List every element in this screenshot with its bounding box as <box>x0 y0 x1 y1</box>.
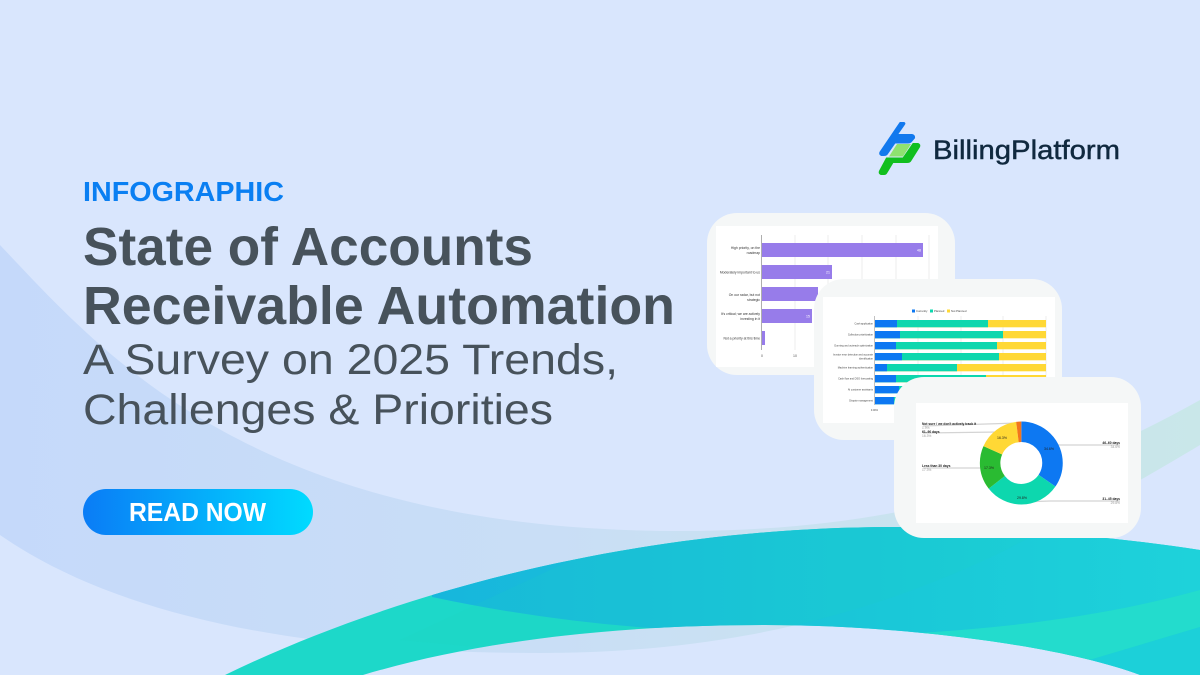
row labels: Machine learning authentication <box>838 366 874 370</box>
title <box>83 217 675 336</box>
panel: days outstanding donut chart <box>894 377 1141 538</box>
bars <box>762 243 923 345</box>
donut labels: 34.6% <box>1111 445 1120 449</box>
row labels: Dunning and outreach optimization <box>834 344 874 348</box>
donut labels: 29.8% <box>1111 501 1120 505</box>
bar labels <box>720 246 760 340</box>
bar labels: roadmap <box>747 251 760 255</box>
donut labels: 46–60 days <box>1102 441 1120 445</box>
panel: adoption stacked bar chart <box>814 279 1062 440</box>
eyebrow label: INFOGRAPHIC <box>83 176 284 207</box>
bar labels: On our radar, but not <box>729 293 760 297</box>
button: read now <box>83 489 313 535</box>
donut labels: Less than 30 days <box>922 464 951 468</box>
icon: logo mark <box>879 122 920 174</box>
leader lines <box>923 423 1120 502</box>
bar labels: Not a priority at this time <box>723 336 760 340</box>
title: State of Accounts <box>83 217 533 277</box>
donut <box>990 432 1052 494</box>
axis labels: 0 <box>761 354 763 358</box>
bar labels: Moderately important to us <box>720 270 760 274</box>
subtitle <box>83 336 618 434</box>
stacked bars <box>875 320 1046 404</box>
row labels: AI customer assistants <box>848 388 874 392</box>
axis labels: 10 <box>793 354 797 358</box>
bar labels: strategic <box>747 298 760 302</box>
logo: BillingPlatform <box>879 122 1120 174</box>
bar values: 21 <box>826 270 830 274</box>
donut values <box>984 436 1054 500</box>
bar labels: It's critical; we are actively <box>721 312 760 316</box>
row labels: identification <box>859 358 874 360</box>
panel: priority bar chart <box>707 213 955 375</box>
bar values: 48 <box>917 248 921 252</box>
legend <box>912 309 967 313</box>
donut labels: 17.3% <box>922 468 931 472</box>
donut labels: 31–45 days <box>1102 497 1120 501</box>
bar labels: investing in it <box>740 317 760 321</box>
donut labels: 61–90 days <box>922 430 940 434</box>
legend: Not Planned <box>951 309 967 313</box>
donut labels <box>922 422 1120 505</box>
legend: Planned <box>934 309 945 313</box>
row labels: 0.00% <box>871 409 879 412</box>
background wave: teal swoosh <box>225 527 1200 675</box>
bar labels: High priority, on the <box>731 246 760 250</box>
logo wordmark: BillingPlatform <box>933 135 1120 165</box>
row labels: Cash flow and DSO forecasting <box>838 378 874 380</box>
subtitle: A Survey on 2025 Trends, <box>83 336 618 384</box>
button: read now: READ NOW <box>129 497 266 527</box>
donut values: 17.3% <box>984 466 994 470</box>
row labels: Cash application <box>855 322 874 326</box>
donut labels: 1.9% <box>922 426 930 430</box>
row labels: Dispute management <box>849 400 873 402</box>
row labels <box>833 322 879 412</box>
row labels: Invoice error detection and accurate <box>833 354 874 356</box>
donut values: 29.8% <box>1017 496 1027 500</box>
title: Receivable Automation <box>83 276 675 336</box>
donut labels: Not sure / we don't actively track it <box>922 422 977 426</box>
axis labels <box>761 354 797 357</box>
donut values: 16.3% <box>997 436 1007 440</box>
subtitle: Challenges & Priorities <box>83 386 553 434</box>
row labels: Collection prioritization <box>848 334 874 336</box>
background wave: pale blue band <box>0 245 1200 653</box>
legend: Currently <box>916 309 928 313</box>
bar values: 15 <box>806 314 810 318</box>
bar values <box>806 248 921 318</box>
donut labels: 16.3% <box>922 434 931 438</box>
donut values: 34.6% <box>1044 447 1054 451</box>
